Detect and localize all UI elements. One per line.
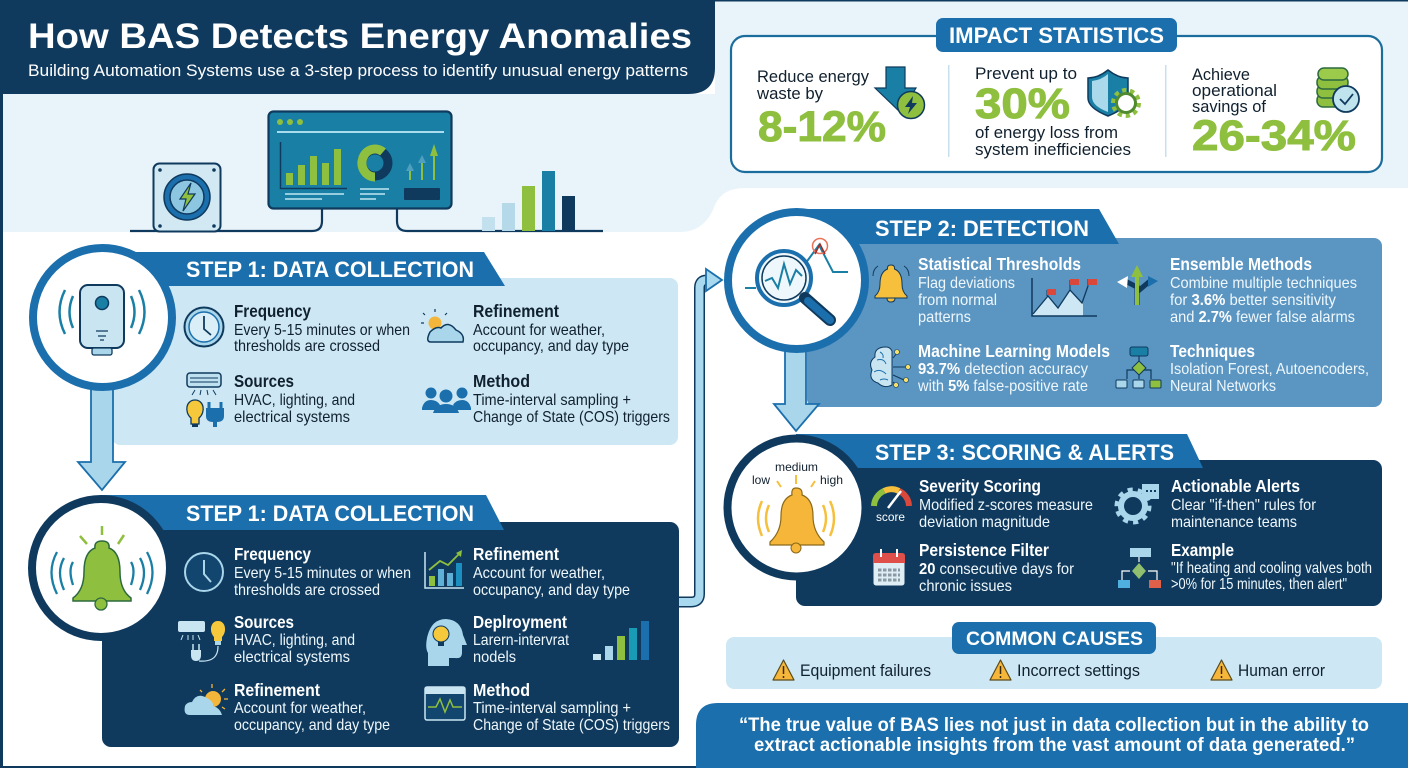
- text block: method: [473, 371, 670, 426]
- heading ribbon: step 2: [797, 209, 1119, 244]
- panel: step 1 data collection (dark): [101, 495, 679, 747]
- text block: actionable alerts: Clear "if-then" rules for: [1171, 497, 1317, 514]
- callout: quote: [696, 703, 1408, 768]
- text block: actionable alerts: Actionable Alerts: [1171, 476, 1300, 496]
- stat: prevent energy loss: 30%: [975, 80, 1070, 128]
- text block: example: [1171, 540, 1372, 593]
- icon: orange bell with severity labels: [728, 438, 866, 576]
- heading ribbon: second step 1: [101, 495, 504, 530]
- text block: sources: HVAC, lighting, and: [234, 392, 355, 409]
- text block: refinement: [473, 301, 629, 355]
- icon: people: [422, 388, 471, 413]
- text block: ensemble methods: for 3.6% better sensitivity: [1170, 292, 1336, 309]
- heading: common causes: COMMON CAUSES: [966, 628, 1143, 650]
- icon: clock: [184, 308, 224, 346]
- text block: method: Method: [473, 680, 530, 700]
- text block: machine learning models: 93.7% detection accuracy: [918, 361, 1088, 378]
- text block: severity scoring: deviation magnitude: [919, 514, 1050, 531]
- text block: sources: Sources: [234, 371, 294, 391]
- heading ribbon: step 2: STEP 2: DETECTION: [875, 216, 1089, 241]
- text block: ensemble methods: Ensemble Methods: [1170, 254, 1312, 274]
- icon: score gauge: score: [876, 512, 905, 524]
- stat: reduce energy waste: waste by: [756, 84, 823, 103]
- text block: ensemble methods: and 2.7% fewer false alarms: [1170, 309, 1355, 326]
- text block: techniques: Neural Networks: [1170, 378, 1276, 395]
- text block: persistence filter: [919, 540, 1075, 595]
- text block: persistence filter: 20 consecutive days for: [919, 561, 1075, 578]
- cause: human error: [1211, 660, 1325, 680]
- text block: frequency: [234, 301, 410, 355]
- bar chart: energy levels: [482, 171, 575, 231]
- text block: frequency: Every 5-15 minutes or when: [234, 565, 411, 582]
- icon: air conditioner: [187, 373, 221, 395]
- text block: frequency: Frequency: [234, 544, 311, 564]
- text block: statistical thresholds: [918, 254, 1081, 326]
- illustration: building energy dashboard: [130, 112, 603, 232]
- cause: incorrect settings: Incorrect settings: [1017, 661, 1140, 680]
- icon: flagged peaks chart: [1032, 278, 1097, 316]
- icon: orange bell with severity labels: low: [752, 473, 770, 487]
- text block: method: [473, 680, 670, 734]
- stat: prevent energy loss: [975, 64, 1138, 159]
- text block: frequency: [234, 544, 411, 599]
- arrow: connector from data collection to detection: [678, 269, 722, 602]
- icon: diverging arrows: [1117, 265, 1158, 305]
- icon: ac, bulb and plug: [178, 621, 225, 661]
- icon: coins with check: [1317, 68, 1359, 112]
- icon: shield with gear: [1088, 70, 1138, 116]
- text block: deployment: nodels: [473, 649, 516, 666]
- text block: refinement: Account for weather,: [473, 322, 605, 339]
- icon: green bell in circle: [32, 499, 170, 637]
- text block: severity scoring: Modified z-scores measure: [919, 497, 1093, 514]
- text block: method: Change of State (COS) triggers: [473, 717, 670, 734]
- heading ribbon: step 1: [135, 252, 505, 286]
- text block: refinement chart: Refinement: [473, 544, 559, 564]
- stat: prevent energy loss: Prevent up to: [975, 64, 1077, 83]
- text block: ensemble methods: [1170, 254, 1357, 326]
- text block: severity scoring: [919, 476, 1093, 531]
- text block: sources: electrical systems: [234, 649, 350, 666]
- heading: impact statistics: IMPACT STATISTICS: [949, 23, 1164, 48]
- text block: frequency: thresholds are crossed: [234, 338, 380, 355]
- title: How BAS Detects Energy Anomalies: [28, 17, 692, 56]
- stat: operational savings: savings of: [1192, 97, 1266, 116]
- heading: impact statistics: [936, 18, 1177, 52]
- text block: frequency: Frequency: [234, 301, 311, 321]
- text block: deployment: Deplroyment: [473, 612, 567, 632]
- text block: sources: [234, 612, 355, 666]
- icon: down arrow with bolt: [875, 67, 924, 118]
- text block: refinement: Account for weather,: [234, 700, 366, 717]
- text block: actionable alerts: [1171, 476, 1317, 531]
- text block: statistical thresholds: from normal: [918, 292, 997, 309]
- icon: orange bell with severity labels: medium: [775, 460, 818, 474]
- stat: reduce energy waste: [756, 67, 924, 151]
- text block: method: Method: [473, 371, 530, 391]
- text block: deployment: Larern-intervrat: [473, 632, 569, 649]
- icon: brain network: [871, 347, 910, 388]
- text block: refinement chart: occupancy, and day type: [473, 582, 630, 599]
- icon: energy meter: [154, 164, 220, 232]
- text block: persistence filter: chronic issues: [919, 578, 1012, 595]
- icon: dashboard monitor: [268, 112, 452, 208]
- text block: statistical thresholds: Statistical Thresholds: [918, 254, 1081, 274]
- text block: frequency: Every 5-15 minutes or when: [234, 322, 410, 339]
- arrow: step 1 down: [78, 385, 125, 490]
- text block: sources: HVAC, lighting, and: [234, 632, 355, 649]
- icon: orange bell with severity labels: high: [820, 473, 843, 487]
- cause: equipment failures: Equipment failures: [800, 661, 931, 680]
- text block: refinement: [234, 680, 390, 734]
- stat: operational savings: 26-34%: [1192, 112, 1356, 160]
- text block: refinement: Refinement: [473, 301, 559, 321]
- icon: sensor in circle: [33, 248, 172, 387]
- text block: techniques: Techniques: [1170, 341, 1255, 361]
- callout: quote: “The true value of BAS lies not just in data collection but in the ability to: [739, 715, 1369, 736]
- text block: refinement chart: Account for weather,: [473, 565, 605, 582]
- panel: step 1 data collection (light): [112, 252, 678, 445]
- icon: growth chart: [425, 550, 464, 588]
- text block: method: Time-interval sampling +: [473, 700, 631, 717]
- icon: sun and cloud: [421, 309, 463, 342]
- text block: example: Example: [1171, 540, 1234, 560]
- icon: magnifier in circle: [728, 212, 865, 349]
- icon: sun and cloud: [185, 684, 228, 715]
- icon: plug: [206, 402, 224, 427]
- icon: pulse window: [425, 687, 465, 720]
- panel: step 2 detection: [797, 209, 1382, 407]
- stat: operational savings: Achieve: [1192, 65, 1250, 84]
- text block: persistence filter: Persistence Filter: [919, 540, 1049, 560]
- text block: severity scoring: Severity Scoring: [919, 476, 1041, 496]
- heading ribbon: step 1: STEP 1: DATA COLLECTION: [186, 257, 474, 282]
- text block: deployment: [473, 612, 569, 666]
- icon: calendar: [873, 549, 905, 586]
- bar chart: deployment: [593, 621, 649, 660]
- heading ribbon: second step 1: STEP 1: DATA COLLECTION: [186, 501, 474, 526]
- stat: prevent energy loss: system inefficiencies: [975, 140, 1131, 159]
- text block: statistical thresholds: patterns: [918, 309, 971, 326]
- stat: operational savings: operational: [1192, 81, 1277, 100]
- text block: refinement chart: [473, 544, 630, 599]
- panel: impact statistics: [731, 18, 1382, 172]
- icon: score gauge: [874, 489, 909, 524]
- icon: gear and speech bubble: [1117, 484, 1159, 522]
- text block: sources: electrical systems: [234, 409, 350, 426]
- title banner: [0, 0, 715, 94]
- text block: method: Time-interval sampling +: [473, 392, 631, 409]
- text block: refinement: Refinement: [234, 680, 320, 700]
- stat: reduce energy waste: Reduce energy: [757, 67, 869, 86]
- text block: machine learning models: with 5% false-positive rate: [917, 378, 1088, 395]
- text block: techniques: [1170, 341, 1369, 395]
- text block: statistical thresholds: Flag deviations: [918, 275, 1015, 292]
- icon: decision flowchart: [1116, 347, 1161, 388]
- heading ribbon: step 3: [796, 434, 1203, 468]
- text block: refinement: occupancy, and day type: [473, 338, 629, 355]
- text block: example: "If heating and cooling valves both: [1171, 560, 1372, 577]
- icon: decision flow: [1118, 548, 1161, 588]
- stat: operational savings: [1192, 65, 1359, 160]
- icon: clock: [185, 553, 223, 591]
- icon: head with bulb: [426, 619, 467, 666]
- panel: common causes: [726, 622, 1382, 689]
- text block: method: Change of State (COS) triggers: [473, 409, 670, 426]
- text block: sources: [234, 371, 355, 426]
- arrow: step 2 down: [774, 350, 819, 431]
- icon: yellow bell: [873, 265, 909, 302]
- text block: actionable alerts: maintenance teams: [1171, 514, 1297, 531]
- text block: ensemble methods: Combine multiple techniques: [1170, 275, 1357, 292]
- text block: frequency: thresholds are crossed: [234, 582, 380, 599]
- text block: sources: Sources: [234, 612, 294, 632]
- subtitle: Building Automation Systems use a 3-step process to identify unusual energy patterns: [28, 62, 688, 80]
- panel: step 3 scoring and alerts: [796, 434, 1382, 606]
- icon: light bulb: [187, 400, 203, 427]
- text block: refinement: occupancy, and day type: [234, 717, 390, 734]
- cause: human error: Human error: [1238, 661, 1325, 680]
- stat: reduce energy waste: 8-12%: [758, 103, 886, 151]
- callout: quote: extract actionable insights from the vast amount of data generated.”: [754, 735, 1355, 756]
- heading: common causes: [952, 622, 1156, 654]
- text block: machine learning models: Machine Learning Models: [918, 341, 1110, 361]
- stat: prevent energy loss: of energy loss from: [975, 123, 1118, 142]
- text block: machine learning models: [917, 341, 1110, 395]
- text block: techniques: Isolation Forest, Autoencoders,: [1170, 361, 1369, 378]
- heading ribbon: step 3: STEP 3: SCORING & ALERTS: [875, 440, 1174, 465]
- text block: example: >0% for 15 minutes, then alert": [1171, 576, 1347, 593]
